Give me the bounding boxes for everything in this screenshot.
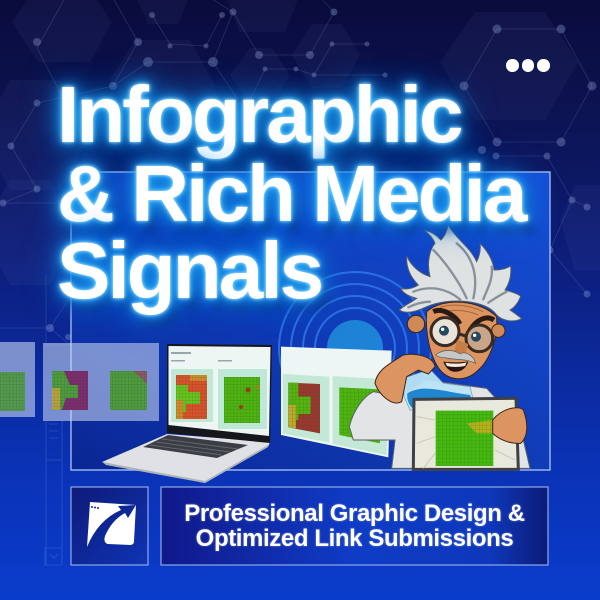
bottom logo box [71, 487, 148, 565]
laptop [102, 344, 272, 483]
professor glasses [431, 310, 494, 352]
title line: & Rich Media: & Rich Media [57, 149, 525, 238]
professor right hand [493, 408, 527, 443]
floating report panel and professor [281, 225, 530, 469]
professor head [426, 302, 497, 379]
title line: Signals: Signals [57, 226, 321, 315]
left sidebar lines [45, 420, 62, 565]
floating report panel [281, 347, 392, 457]
subtitle line 1: Professional Graphic Design & [184, 500, 525, 527]
bottom text box background [161, 487, 548, 565]
title line: Infographic: Infographic [57, 70, 461, 159]
beaker [403, 369, 487, 423]
professor moustache and mouth [436, 340, 476, 372]
main blue frame [71, 172, 550, 470]
professor left hand [375, 354, 435, 403]
tablet with green grid [413, 398, 518, 469]
professor coat [349, 380, 530, 468]
subtitle line 2: Optimized Link Submissions [196, 525, 513, 552]
three dots icon [506, 59, 550, 72]
professor hair [399, 225, 522, 321]
faded report panels [0, 342, 159, 421]
concentric signal rings [279, 272, 431, 424]
